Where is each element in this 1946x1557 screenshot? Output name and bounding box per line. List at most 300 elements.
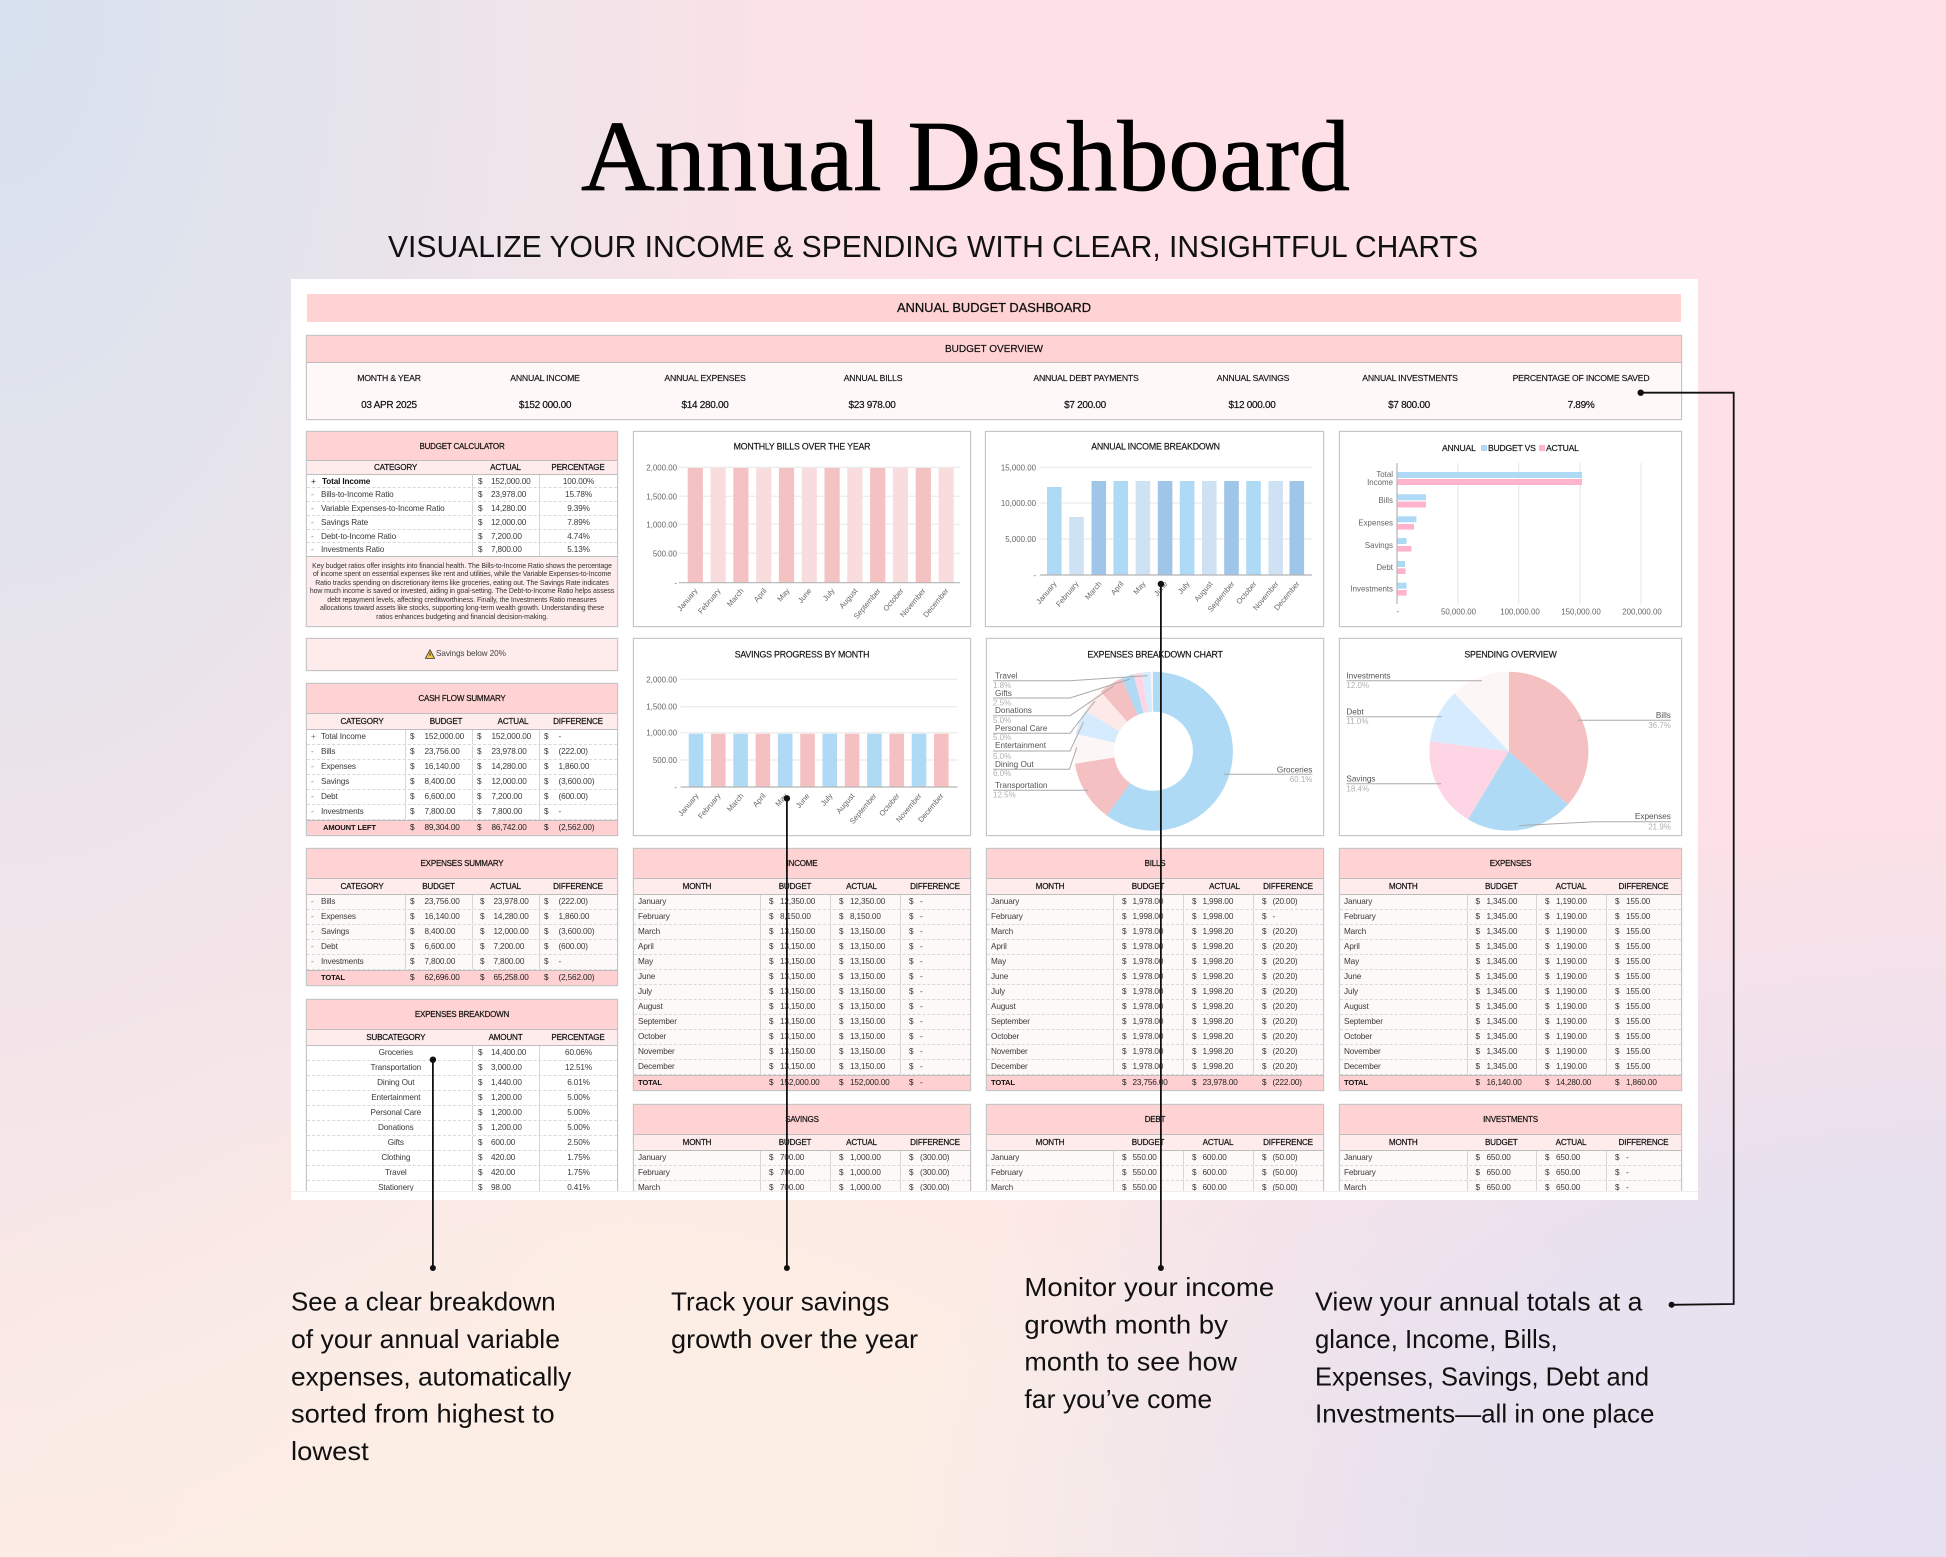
table: expenses: $ (1476, 1078, 1480, 1087)
table: expenses: November (1344, 1047, 1381, 1056)
table: expenses summary: Investments (321, 957, 364, 966)
table: income: $ (839, 1032, 843, 1041)
table: income: - (920, 1078, 923, 1087)
chart: monthly bills over the year: January (675, 586, 700, 613)
table: investments: $ (1476, 1183, 1480, 1192)
table: bills: January (991, 896, 1019, 906)
table: savings: BUDGET (779, 1138, 811, 1147)
chart: expenses breakdown donut: Entertainment (995, 741, 1047, 750)
table: savings: $ (909, 1152, 913, 1162)
table: bills: TOTAL (991, 1078, 1015, 1087)
table: expenses: December (1344, 1062, 1381, 1071)
table: expenses summary: (222.00) (558, 896, 588, 906)
table: cash flow summary: 1,860.00 (558, 762, 589, 771)
table: cash flow summary: Bills (321, 747, 335, 756)
table: investments: - (1626, 1183, 1629, 1192)
arrow: overview callout line (1638, 390, 1735, 1308)
chart: annual income breakdown: January (1034, 579, 1059, 606)
table: cash flow summary: Expenses (321, 762, 356, 771)
table: expenses summary: DIFFERENCE (553, 882, 603, 891)
text block: annual totals caption: Expenses, Savings, Debt and (1315, 1361, 1649, 1391)
table: expenses summary: $ (410, 973, 414, 982)
note: key budget ratios: ratios enhances budgeting and financial decision-making. (376, 614, 548, 621)
chart: savings progress by month (634, 639, 970, 835)
table: bills: $ (1122, 972, 1126, 981)
text block: savings caption: Track your savings (671, 1287, 889, 1317)
text block: variable expenses caption (291, 1287, 572, 1466)
table: expenses summary: $ (544, 973, 548, 982)
table: expenses: 155.00 (1626, 942, 1650, 951)
table: expenses breakdown: 3,000.00 (491, 1063, 522, 1072)
table: income: - (920, 987, 923, 996)
table: savings: SAVINGS (785, 1115, 819, 1124)
note: key budget ratios: Ratio tracks spending on discretionary items like groceries, eating out. The Savings Rate indicates (315, 580, 609, 587)
table: expenses: $ (1615, 972, 1619, 981)
table: income: $ (909, 942, 913, 951)
table: expenses: $ (1545, 1078, 1549, 1087)
table: budget calculator: - (311, 532, 314, 541)
table: budget calculator: $ (478, 504, 482, 513)
chart: annual income breakdown: May (1131, 579, 1148, 596)
table: bills: (20.20) (1272, 942, 1297, 951)
table: expenses summary: 16,140.00 (424, 912, 460, 921)
table: income: 13,150.00 (780, 942, 815, 951)
table: income: DIFFERENCE (910, 882, 960, 891)
table: bills: $ (1122, 1047, 1126, 1056)
table: bills: 1,998.20 (1202, 1002, 1233, 1011)
chart: spending overview pie: Savings (1346, 774, 1376, 784)
table: income: 13,150.00 (850, 957, 885, 966)
table: income: April (638, 942, 654, 951)
table: income: $ (909, 1032, 913, 1041)
table: cash flow summary: $ (477, 807, 481, 816)
table: cash flow summary: (600.00) (558, 792, 588, 801)
table: debt: $ (1262, 1152, 1266, 1162)
chart: savings progress by month: SAVINGS PROGRESS BY MONTH (735, 650, 869, 660)
table: income: 13,150.00 (780, 987, 815, 996)
chart: expenses breakdown donut: 12.5% (993, 790, 1016, 800)
table: investments: MONTH (1389, 1138, 1418, 1147)
table: income: - (920, 927, 923, 936)
table: bills: July (991, 987, 1005, 996)
table: income: - (920, 957, 923, 966)
table: income: 13,150.00 (850, 1032, 885, 1041)
table: expenses summary: CATEGORY (340, 882, 384, 891)
table: bills: March (991, 927, 1013, 936)
overview labels and values: PERCENTAGE OF INCOME SAVED (1513, 373, 1649, 383)
table: expenses: 155.00 (1626, 912, 1650, 921)
text block: annual totals caption: Investments—all in one place (1315, 1399, 1654, 1429)
table: expenses: 1,345.00 (1486, 927, 1517, 936)
table: expenses summary: $ (410, 942, 414, 951)
table: debt: February (991, 1168, 1023, 1177)
table: bills: 1,998.00 (1132, 912, 1163, 921)
table: savings: (300.00) (920, 1168, 949, 1177)
table: cash flow summary: Savings (321, 777, 349, 786)
chart: annual income breakdown: February (1054, 579, 1081, 609)
text block: income caption: month to see how (1024, 1347, 1237, 1377)
table: expenses summary: Savings (321, 927, 349, 936)
table: expenses: $ (1476, 896, 1480, 906)
table: investments: - (1626, 1152, 1629, 1162)
callout: savings warning: Savings below 20% (436, 649, 506, 658)
heading: annual budget dashboard: ANNUAL BUDGET DASHBOARD (897, 300, 1091, 315)
table: expenses breakdown (307, 1000, 617, 1196)
table: budget calculator: $ (478, 490, 482, 499)
table: income: 13,150.00 (850, 1017, 885, 1026)
table: bills: 1,998.00 (1202, 912, 1233, 921)
table: cash flow summary: 152,000.00 (424, 732, 464, 740)
chart: savings progress by month: July (819, 791, 835, 808)
table: income: TOTAL (638, 1078, 662, 1087)
table: cash flow summary: + (311, 732, 316, 740)
table: cash flow summary: $ (410, 792, 414, 801)
table: bills: DIFFERENCE (1263, 882, 1313, 891)
table: expenses: July (1344, 987, 1358, 996)
table: cash flow summary: 6,600.00 (424, 792, 455, 801)
table: expenses: October (1344, 1032, 1372, 1041)
icon: warning triangle (425, 649, 435, 659)
table: expenses: August (1344, 1002, 1369, 1011)
table: expenses: 155.00 (1626, 1032, 1650, 1041)
table: budget calculator: 7.89% (567, 518, 590, 527)
table: bills: $ (1262, 1062, 1266, 1071)
table: savings (634, 1105, 970, 1196)
table: expenses: $ (1615, 912, 1619, 921)
table: expenses breakdown: $ (478, 1138, 482, 1147)
table: cash flow summary: $ (410, 807, 414, 816)
table: expenses summary: $ (480, 973, 484, 982)
table: savings: February (638, 1168, 670, 1177)
table: budget calculator: Savings Rate (321, 518, 368, 527)
table: savings: MONTH (683, 1138, 711, 1147)
table: budget calculator: ACTUAL (490, 463, 521, 472)
table: budget calculator: 12,000.00 (491, 518, 526, 527)
table: budget calculator: - (311, 504, 314, 513)
table: budget calculator: Debt-to-Income Ratio (321, 532, 396, 541)
table: income: $ (909, 987, 913, 996)
table: expenses: $ (1615, 942, 1619, 951)
arrow: expenses breakdown callout line (430, 1056, 436, 1271)
table: expenses: 155.00 (1626, 1017, 1650, 1026)
table: expenses: 1,190.00 (1556, 942, 1587, 951)
table: cash flow summary: $ (477, 762, 481, 771)
table: expenses: 1,190.00 (1556, 1002, 1587, 1011)
table: income: $ (769, 896, 773, 906)
table: bills: 23,978.00 (1202, 1078, 1238, 1087)
table: expenses: 1,190.00 (1556, 896, 1587, 906)
table: debt: January (991, 1152, 1019, 1162)
table: savings: $ (769, 1183, 773, 1192)
chart: spending overview pie: 11.0% (1346, 717, 1368, 726)
chart: monthly bills over the year: 1,000.00 (646, 520, 678, 529)
chart: spending overview pie: Expenses (1635, 812, 1671, 821)
table: bills: May (991, 957, 1006, 966)
table: budget calculator: 4.74% (567, 532, 590, 541)
table: budget calculator: Total Income (322, 476, 370, 486)
table: savings: March (638, 1183, 660, 1192)
table: income: 12,350.00 (850, 896, 885, 906)
table: income: March (638, 927, 660, 936)
table: expenses: $ (1545, 1032, 1549, 1041)
table: expenses summary: - (311, 896, 314, 906)
table: debt: $ (1122, 1183, 1126, 1192)
table: cash flow summary: $ (544, 807, 548, 816)
table: bills (987, 849, 1323, 1090)
table: budget calculator: Investments Ratio (321, 545, 384, 554)
chart: spending overview pie: SPENDING OVERVIEW (1464, 650, 1558, 660)
text block: variable expenses caption: of your annual variable (291, 1324, 560, 1354)
table: income: 13,150.00 (850, 927, 885, 936)
table: income: BUDGET (779, 882, 811, 891)
table: income: 13,150.00 (780, 957, 815, 966)
table: expenses summary: 6,600.00 (424, 942, 455, 951)
chart: expenses breakdown donut: Groceries (1277, 766, 1312, 774)
table: expenses: 1,345.00 (1486, 1032, 1517, 1041)
table: expenses: 1,190.00 (1556, 912, 1587, 921)
chart: annual budget vs actual: 150,000.00 (1561, 608, 1601, 616)
table: expenses: $ (1476, 912, 1480, 921)
table: income: 13,150.00 (850, 972, 885, 981)
chart: annual budget vs actual: 200,000.00 (1622, 608, 1662, 616)
note: key budget ratios: Key budget ratios offer insights into financial health. The Bills-to-Income Ratio shows the percentage (312, 563, 612, 570)
table: expenses breakdown: Gifts (388, 1138, 404, 1147)
text block: income caption: Monitor your income (1024, 1272, 1274, 1302)
table: expenses breakdown: 420.00 (491, 1168, 515, 1177)
chart: monthly bills over the year: December (921, 586, 951, 619)
table: bills: 1,998.20 (1202, 927, 1233, 936)
chart: savings progress by month: February (696, 791, 723, 821)
table: expenses summary: $ (480, 912, 484, 921)
table: bills: September (991, 1017, 1030, 1026)
table: cash flow summary: $ (477, 747, 481, 756)
table: budget calculator: $ (478, 518, 482, 527)
table: savings: $ (839, 1168, 843, 1177)
table: savings: 700.00 (780, 1183, 804, 1192)
table: cash flow summary: 8,400.00 (424, 777, 455, 786)
table: bills: $ (1262, 912, 1266, 921)
table: bills: 1,998.20 (1202, 1032, 1233, 1041)
table: income: $ (839, 957, 843, 966)
chart: annual budget vs actual: Debt (1376, 563, 1394, 572)
table: cash flow summary (307, 684, 617, 835)
table: bills: 1,998.20 (1202, 972, 1233, 981)
table: expenses: $ (1545, 896, 1549, 906)
table: expenses breakdown: $ (478, 1183, 482, 1192)
table: budget calculator: CATEGORY (374, 463, 417, 472)
table: cash flow summary: AMOUNT LEFT (323, 823, 376, 832)
chart: annual budget vs actual: 100,000.00 (1500, 608, 1540, 616)
table: expenses: 1,190.00 (1556, 927, 1587, 936)
chart: monthly bills over the year: - (674, 579, 677, 588)
table: income: - (920, 942, 923, 951)
table: income: $ (769, 1047, 773, 1056)
table: cash flow summary: 12,000.00 (492, 777, 527, 786)
table: expenses: 1,190.00 (1556, 1032, 1587, 1041)
table: income: $ (769, 1062, 773, 1071)
table: expenses summary: $ (410, 896, 414, 906)
table: bills: 1,978.00 (1132, 942, 1163, 951)
chart: expenses breakdown donut: 1.8% (993, 681, 1011, 690)
table: expenses: DIFFERENCE (1619, 882, 1668, 891)
table: expenses summary: TOTAL (321, 973, 345, 982)
table: bills: $ (1122, 1032, 1126, 1041)
table: expenses breakdown: 420.00 (491, 1153, 515, 1162)
table: budget calculator: - (311, 545, 314, 554)
table: investments: 650.00 (1486, 1183, 1511, 1192)
table: income: - (920, 896, 923, 906)
chart: spending overview pie: Investments (1346, 672, 1391, 680)
overview labels and values: ANNUAL INVESTMENTS (1362, 373, 1458, 383)
overview labels and values: ANNUAL DEBT PAYMENTS (1033, 373, 1139, 383)
table: bills: $ (1262, 987, 1266, 996)
table: bills: $ (1192, 1078, 1196, 1087)
table: cash flow summary: $ (410, 777, 414, 786)
table: income: $ (839, 1047, 843, 1056)
table: cash flow summary: $ (410, 762, 414, 771)
table: bills: 1,998.20 (1202, 942, 1233, 951)
chart: monthly bills over the year: February (696, 586, 723, 616)
table: investments: 650.00 (1556, 1183, 1580, 1192)
table: cash flow summary: 7,800.00 (424, 807, 455, 816)
chart: savings progress by month: November (894, 791, 924, 824)
table: expenses breakdown: Personal Care (371, 1108, 421, 1117)
table: expenses summary: - (311, 912, 314, 921)
table: expenses: $ (1615, 927, 1619, 936)
table: income: - (920, 1047, 923, 1056)
table: expenses: 1,345.00 (1486, 896, 1517, 906)
table: expenses: $ (1476, 942, 1480, 951)
chart: annual income breakdown: - (1033, 571, 1036, 580)
table: bills: $ (1262, 942, 1266, 951)
chart: annual budget vs actual: BUDGET VS (1488, 443, 1536, 453)
table: expenses: 1,190.00 (1556, 987, 1587, 996)
chart: monthly bills over the year: August (837, 586, 860, 610)
table: expenses: 1,190.00 (1556, 1062, 1587, 1071)
overview labels and values: $12 000.00 (1228, 400, 1276, 411)
overview labels and values: ANNUAL SAVINGS (1217, 373, 1289, 383)
table: expenses: 155.00 (1626, 972, 1650, 981)
table: debt: March (991, 1183, 1013, 1192)
table: expenses summary: (600.00) (558, 942, 588, 951)
table: savings: 1,000.00 (850, 1183, 881, 1192)
chart: spending overview pie (1340, 639, 1681, 835)
table: expenses: 155.00 (1626, 987, 1650, 996)
table: cash flow summary: 23,756.00 (424, 747, 460, 756)
table: bills: BUDGET (1132, 882, 1164, 891)
chart: savings progress by month: 1,000.00 (646, 729, 678, 738)
table: expenses: MONTH (1389, 882, 1418, 891)
table: expenses breakdown: Stationery (378, 1183, 414, 1192)
table: investments: - (1626, 1168, 1629, 1177)
table: expenses summary: - (311, 957, 314, 966)
chart: expenses breakdown donut: 5.0% (993, 716, 1011, 725)
chart: expenses breakdown donut: Travel (995, 672, 1018, 680)
table: bills: 1,978.00 (1132, 972, 1163, 981)
table: bills: (20.00) (1272, 896, 1297, 906)
chart: savings progress by month: August (834, 791, 857, 815)
chart: annual income breakdown: April (1109, 579, 1126, 597)
table: income: $ (769, 942, 773, 951)
table: expenses summary: $ (410, 927, 414, 936)
chart: spending overview pie: 36.7% (1648, 721, 1671, 730)
chart: annual budget vs actual: Income (1367, 478, 1394, 487)
text block: variable expenses caption: lowest (291, 1436, 370, 1466)
table: cash flow summary: Total Income (321, 732, 366, 740)
text block: variable expenses caption: See a clear breakdown (291, 1287, 556, 1317)
chart: expenses breakdown donut: Gifts (995, 689, 1012, 698)
table: bills: 1,978.00 (1132, 1017, 1163, 1026)
table: cash flow summary: (2,562.00) (558, 823, 594, 832)
table: bills: $ (1192, 957, 1196, 966)
table: cash flow summary: - (311, 747, 314, 756)
table: bills: $ (1192, 972, 1196, 981)
table: income: May (638, 957, 653, 966)
table: cash flow summary: (222.00) (558, 747, 588, 756)
table: expenses: 1,190.00 (1556, 1047, 1587, 1056)
chart: annual income breakdown: 10,000.00 (1001, 499, 1037, 508)
chart: annual income breakdown: October (1234, 579, 1259, 606)
table: expenses: February (1344, 912, 1376, 921)
table: income: $ (769, 987, 773, 996)
table: income: 13,150.00 (850, 1047, 885, 1056)
table: cash flow summary: 7,200.00 (492, 792, 522, 801)
table: expenses breakdown: $ (478, 1093, 482, 1102)
table: expenses: 1,190.00 (1556, 972, 1587, 981)
table: expenses breakdown: 1,200.00 (491, 1108, 522, 1117)
table: bills: (20.20) (1272, 927, 1297, 936)
chart: annual income breakdown: March (1083, 580, 1104, 601)
table: expenses: May (1344, 957, 1359, 966)
table: cash flow summary: $ (544, 732, 548, 740)
table: expenses summary: $ (480, 957, 484, 966)
table: income: 13,150.00 (850, 987, 885, 996)
table: income: - (920, 1017, 923, 1026)
table: expenses: $ (1545, 987, 1549, 996)
table: expenses summary: ACTUAL (490, 882, 521, 891)
table: savings: 1,000.00 (850, 1152, 881, 1162)
table: bills: $ (1192, 1002, 1196, 1011)
table: bills: (20.20) (1272, 1062, 1297, 1071)
table: bills: (20.20) (1272, 957, 1297, 966)
overview labels and values: ANNUAL EXPENSES (664, 373, 746, 383)
table: expenses summary: - (558, 957, 561, 966)
table: expenses breakdown: 5.00% (567, 1093, 590, 1102)
table: debt: DEBT (1145, 1115, 1165, 1124)
table: savings: ACTUAL (846, 1138, 877, 1147)
table: bills: $ (1122, 1062, 1126, 1071)
table: expenses summary: $ (544, 896, 548, 906)
table: income: - (920, 1062, 923, 1071)
chart: monthly bills over the year: June (796, 587, 814, 605)
table: bills: $ (1192, 1032, 1196, 1041)
table: expenses: 1,345.00 (1486, 1047, 1517, 1056)
table: investments: INVESTMENTS (1483, 1115, 1538, 1124)
table: income: $ (909, 1078, 913, 1087)
table: expenses: $ (1476, 1047, 1480, 1056)
table: expenses: 1,345.00 (1486, 972, 1517, 981)
table: income: 13,150.00 (780, 972, 815, 981)
table: investments: 650.00 (1486, 1168, 1511, 1177)
table: cash flow summary: $ (544, 777, 548, 786)
table: budget calculator: BUDGET CALCULATOR (419, 442, 505, 451)
table: bills: MONTH (1036, 882, 1064, 891)
chart: monthly bills over the year: May (775, 586, 792, 603)
table: expenses: $ (1545, 1002, 1549, 1011)
table: investments: 650.00 (1556, 1168, 1580, 1177)
table: income: $ (769, 972, 773, 981)
table: expenses summary: $ (544, 942, 548, 951)
